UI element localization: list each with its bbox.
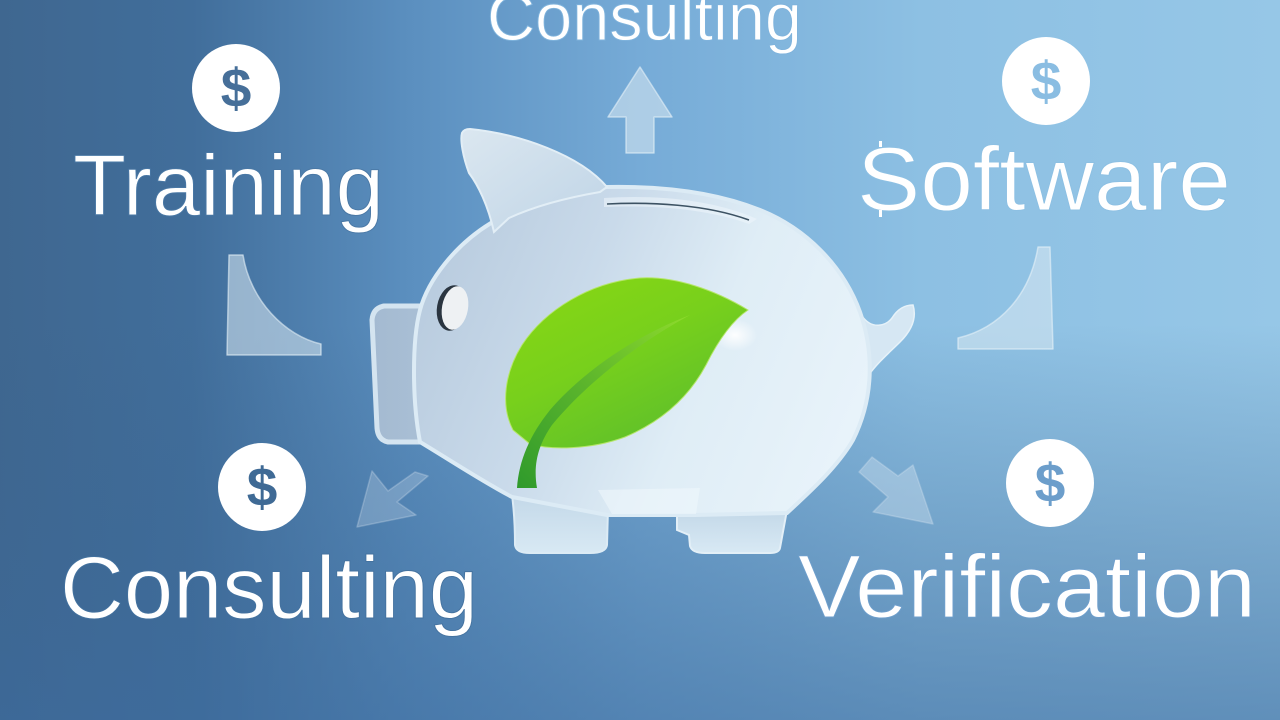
coin slot (604, 197, 757, 224)
item: Verification (798, 439, 1256, 636)
arrow: up (608, 67, 672, 153)
rear foot (677, 510, 787, 553)
icon: dollar coin Software: $ (1031, 50, 1061, 112)
icon: dollar coin Verification: $ (1035, 452, 1065, 514)
body (414, 187, 870, 515)
item: bottom Consulting (60, 443, 478, 637)
icon: dollar coin Software (1002, 37, 1090, 125)
belly highlight (598, 488, 700, 514)
icon: dollar coin Training (192, 44, 280, 132)
front foot (512, 495, 608, 553)
ear (461, 129, 607, 232)
label: Software: Software (857, 130, 1231, 230)
icon: dollar coin Training: $ (221, 57, 251, 119)
tail (862, 305, 914, 376)
label: Training: Training (73, 138, 384, 234)
item: Software (857, 37, 1231, 349)
piggy bank (372, 129, 914, 553)
eye (433, 283, 472, 333)
leaf (506, 278, 748, 488)
icon: dollar coin Consulting (218, 443, 306, 531)
item: Training (73, 44, 384, 355)
leaf stem (517, 315, 690, 488)
arrow: down-right (859, 457, 933, 524)
label: Consulting: Consulting (60, 538, 478, 637)
icon: dollar coin Verification (1006, 439, 1094, 527)
highlight (713, 319, 757, 351)
snout (372, 306, 424, 442)
label: Verification: Verification (798, 536, 1256, 636)
icon: dollar coin Consulting: $ (247, 456, 277, 518)
arrow: curved right (958, 247, 1053, 349)
arrow: curved left (227, 255, 321, 355)
arrow: down-left (357, 471, 428, 527)
